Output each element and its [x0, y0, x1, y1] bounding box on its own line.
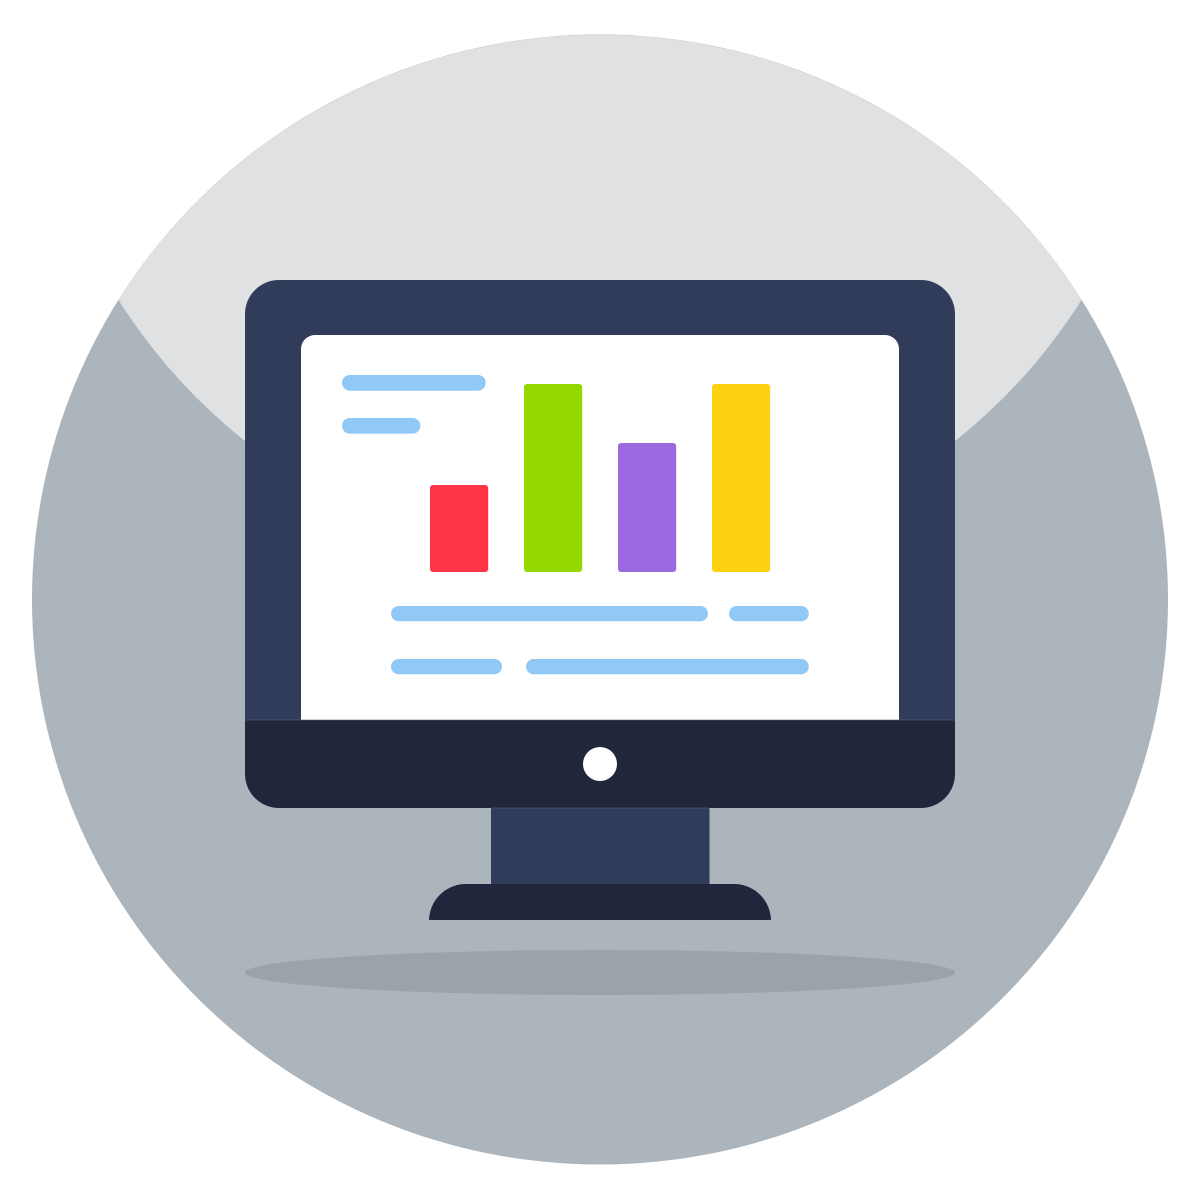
bar: purple: [618, 443, 676, 572]
power button: [583, 747, 617, 781]
monitor stand base: [429, 884, 771, 920]
bar: yellow: [712, 384, 770, 572]
screen: [301, 335, 899, 720]
text lines top left: [342, 375, 486, 434]
monitor bottom bezel: [245, 720, 955, 808]
ground shadow: [245, 950, 955, 995]
bar: red: [430, 485, 488, 572]
monitor stand neck: [491, 808, 710, 885]
bar: green: [524, 384, 582, 572]
monitor frame: [245, 280, 955, 720]
bar chart: [430, 384, 770, 572]
text lines below chart: [391, 606, 809, 674]
